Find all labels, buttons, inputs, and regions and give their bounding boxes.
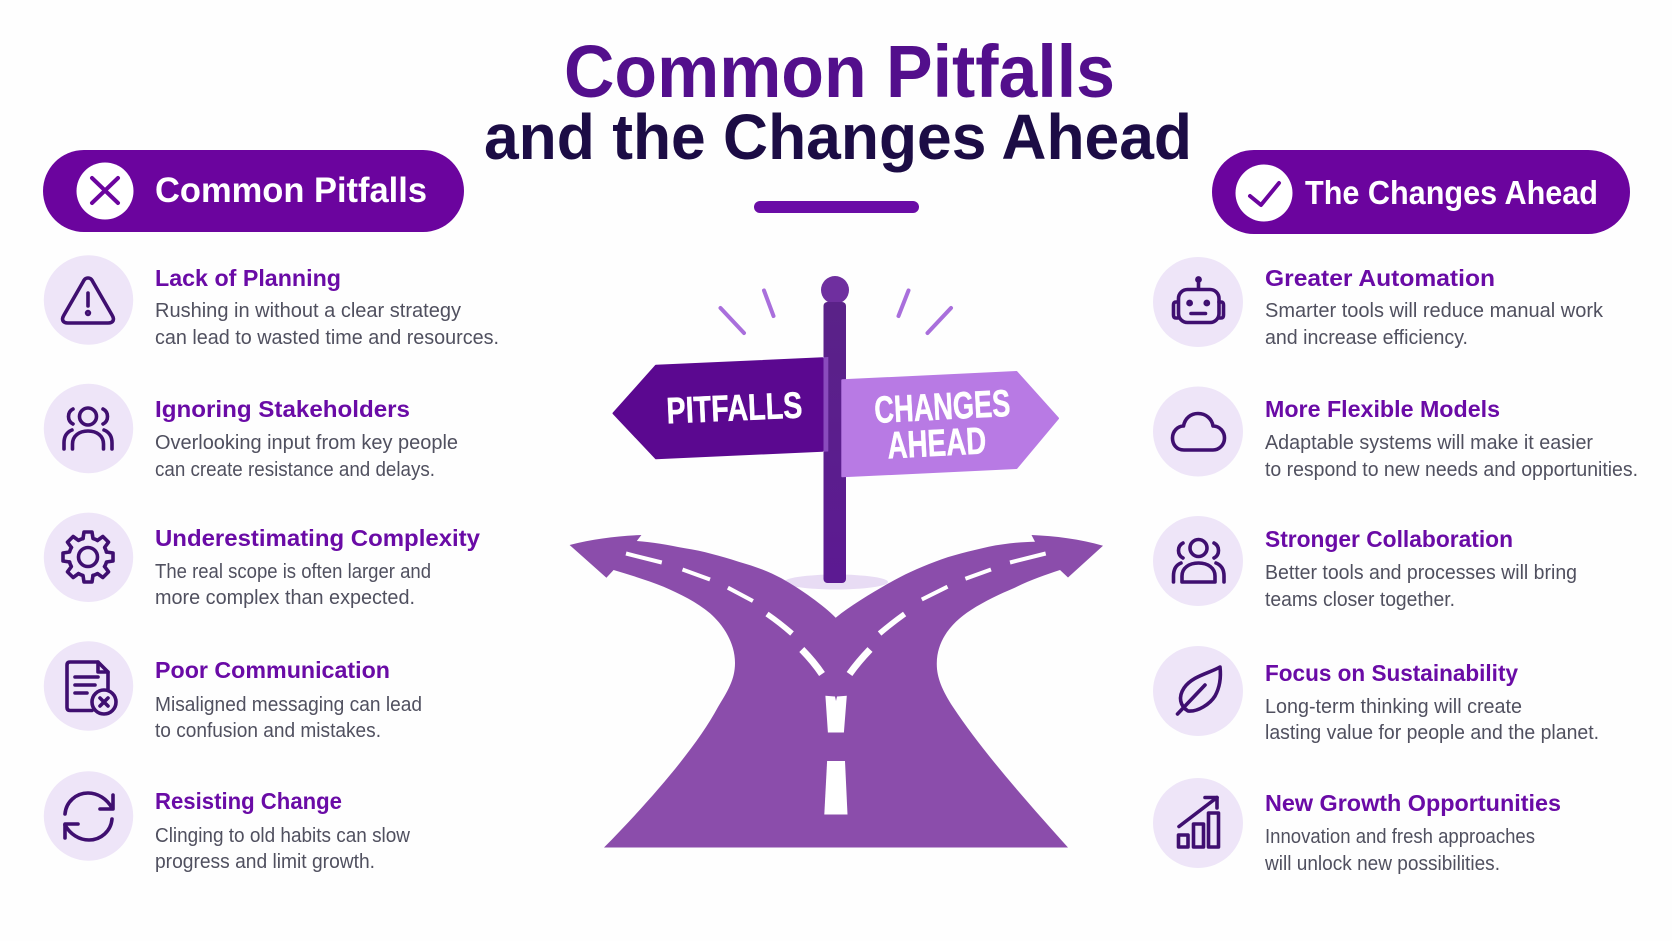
item: Focus on Sustainability: lasting value for people and the planet. <box>1265 722 1599 744</box>
icon: robot <box>1174 278 1224 322</box>
item: More Flexible Models: Adaptable systems will make it easier <box>1265 432 1593 454</box>
item: Underestimating Complexity: Underestimating Complexity <box>155 525 480 551</box>
item: Greater Automation <box>1153 257 1604 349</box>
panel header: Common Pitfalls: Common Pitfalls <box>155 171 427 210</box>
panel header: Common Pitfalls <box>43 150 464 232</box>
item: Lack of Planning: Rushing in without a clear strategy <box>155 300 461 322</box>
item: Ignoring Stakeholders: Ignoring Stakeholders <box>155 396 410 422</box>
item: Resisting Change <box>44 771 411 873</box>
item: New Growth Opportunities: New Growth Opportunities <box>1265 790 1561 816</box>
item: More Flexible Models: to respond to new needs and opportunities. <box>1265 459 1638 481</box>
illustration: crossroads signpost <box>570 276 1103 848</box>
item: Poor Communication: Poor Communication <box>155 657 390 683</box>
item: Resisting Change: Clinging to old habits can slow <box>155 825 411 847</box>
sign: PITFALLS <box>614 357 828 458</box>
icon: team <box>1174 540 1224 582</box>
pole base shadow <box>784 574 888 590</box>
panel: changes ahead list <box>1153 257 1638 875</box>
icon: warning triangle <box>63 278 113 323</box>
icon: leaf <box>1178 667 1220 714</box>
item: Stronger Collaboration: Better tools and processes will bring <box>1265 562 1577 584</box>
panel: common pitfalls list <box>44 255 499 873</box>
icon: cloud <box>1172 414 1224 450</box>
item: Resisting Change: progress and limit growth. <box>155 851 375 873</box>
item: More Flexible Models: More Flexible Models <box>1265 396 1500 422</box>
title: Common Pitfalls <box>564 30 1115 113</box>
item: Underestimating Complexity <box>44 513 480 609</box>
item: Lack of Planning: can lead to wasted time and resources. <box>155 327 499 349</box>
item: Ignoring Stakeholders: can create resistance and delays. <box>155 459 435 481</box>
item: New Growth Opportunities <box>1153 778 1561 875</box>
sign: CHANGES AHEAD <box>842 372 1058 476</box>
sign: CHANGES AHEAD: CHANGES <box>873 383 1011 432</box>
item: Greater Automation: and increase efficiency. <box>1265 327 1468 349</box>
item: Stronger Collaboration: teams closer together. <box>1265 589 1455 611</box>
road dashes <box>626 554 1046 674</box>
item: Focus on Sustainability: Focus on Sustainability <box>1265 660 1518 686</box>
attention rays <box>720 290 951 333</box>
item: Focus on Sustainability <box>1153 646 1599 744</box>
item: New Growth Opportunities: will unlock new possibilities. <box>1264 853 1500 875</box>
item: Poor Communication <box>44 641 422 742</box>
panel header: The Changes Ahead: The Changes Ahead <box>1305 174 1598 211</box>
item: New Growth Opportunities: Innovation and fresh approaches <box>1265 826 1535 848</box>
item: Underestimating Complexity: The real scope is often larger and <box>155 561 431 583</box>
item: Poor Communication: to confusion and mistakes. <box>155 720 381 742</box>
icon: growth chart <box>1178 798 1218 847</box>
item: Stronger Collaboration <box>1153 516 1577 611</box>
title <box>484 30 1192 173</box>
icon: gear <box>63 532 113 582</box>
item: Poor Communication: Misaligned messaging can lead <box>155 694 422 716</box>
item: More Flexible Models <box>1153 386 1638 481</box>
item: Underestimating Complexity: more complex than expected. <box>155 587 415 609</box>
road fork <box>570 535 1103 848</box>
sign: CHANGES AHEAD: AHEAD <box>886 420 987 467</box>
item: Resisting Change: Resisting Change <box>155 788 342 814</box>
item: Lack of Planning: Lack of Planning <box>155 265 341 291</box>
title underline <box>754 201 919 213</box>
signpost pole <box>821 276 849 583</box>
item: Focus on Sustainability: Long-term thinking will create <box>1265 696 1522 718</box>
item: Stronger Collaboration: Stronger Collaboration <box>1265 526 1513 552</box>
item: Ignoring Stakeholders: Overlooking input from key people <box>155 432 458 454</box>
sign: PITFALLS: PITFALLS <box>666 385 803 431</box>
panel header: The Changes Ahead <box>1212 150 1630 234</box>
item: Lack of Planning <box>44 255 499 349</box>
icon: sync arrows <box>65 793 113 840</box>
icon: document with x <box>67 662 116 714</box>
item: Ignoring Stakeholders <box>44 384 458 481</box>
icon: people <box>64 408 112 449</box>
item: Greater Automation: Smarter tools will reduce manual work <box>1265 300 1604 322</box>
item: Greater Automation: Greater Automation <box>1265 265 1495 291</box>
title: and the Changes Ahead <box>484 101 1192 173</box>
